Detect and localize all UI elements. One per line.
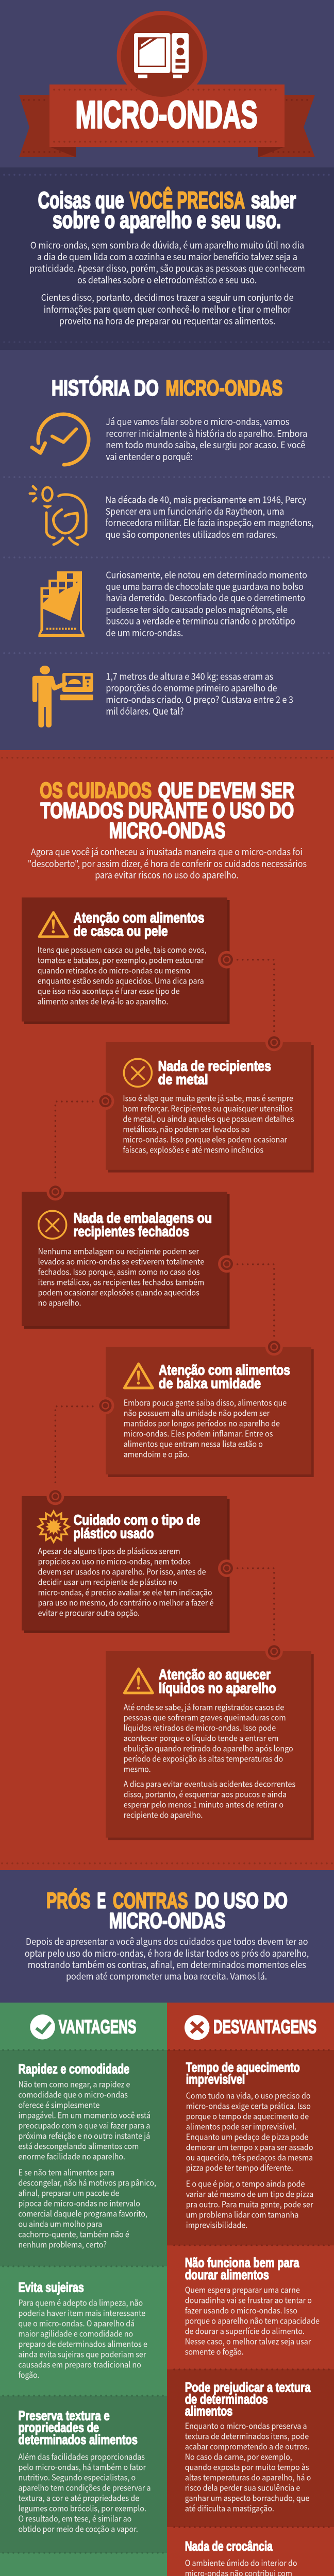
item: rapidez e comodidade: oferece é simplesmente: [19, 2098, 100, 2110]
text block: intro paragraphs: praticidade. Apesar disso, porém, são poucas as pessoas que conhecem: [29, 261, 305, 275]
card text: [123, 1092, 294, 1156]
card text: itens metálicos, os recipientes fechados também: [38, 1275, 204, 1287]
card heading: [158, 1058, 271, 1087]
heading: coisas que você precisa saber: Coisas que: [38, 187, 124, 213]
text: history intro: vai entender o porquê:: [106, 450, 193, 463]
card text: [124, 1396, 287, 1460]
item: não funciona bem para dourar: porque o aparelho não tem capacidade: [185, 2314, 320, 2326]
card: tipo de plástico: [22, 1496, 230, 1633]
card heading: de metal: [158, 1071, 208, 1087]
heading: coisas que você precisa saber: VOCÊ PRECISA: [129, 187, 245, 213]
item: tempo de aquecimento: imprevisível: [186, 2072, 245, 2087]
item: preserva textura: obtido por meio de cocção a vapor.: [19, 2522, 138, 2534]
item: nada de crocância: Nada de crocância: [185, 2538, 273, 2554]
item: evita sujeiras: causadas em preparo tradicional no: [19, 2358, 141, 2370]
item: rapidez e comodidade: comodidade que o micro-ondas: [19, 2088, 128, 2100]
item: tempo de aquecimento: porque o tempo de aquecimento de: [186, 2109, 309, 2122]
item: rapidez e comodidade: comercial daquele programa favorito,: [19, 2207, 147, 2219]
item: evita sujeiras: maior agilidade e comodidade no: [19, 2327, 133, 2339]
vantagens header: [30, 2014, 136, 2039]
item: tempo de aquecimento: ou aquecido, três pedaços da mesma: [186, 2150, 313, 2163]
item: pode prejudicar a textura: No caso da carne, por exemplo,: [185, 2450, 292, 2462]
card: aquecer líquidos: [106, 1651, 314, 1840]
badge: outer circle: [116, 11, 207, 101]
card text: Apesar de alguns tipos de plásticos serem: [38, 1545, 180, 1557]
heading: história: HISTÓRIA DO: [52, 375, 159, 400]
card text: quando retirados do micro-ondas ou mesmo: [38, 963, 190, 976]
card text: não possuem alta umidade não podem ser: [124, 1406, 270, 1419]
icon: person with lightbulb idea: [30, 486, 86, 545]
text: dimensions: mil dólares. Que tal?: [106, 704, 184, 718]
text: chocolate: buscou a verdade e terminou criando o protótipo: [106, 614, 295, 628]
icon: chocolate bar: [38, 571, 85, 637]
item: tempo de aquecimento: pizza pode ter tempo diferente.: [186, 2161, 293, 2173]
ribbon banner: [19, 84, 315, 157]
item: não funciona bem para dourar: Nesse caso, o melhor talvez seja usar: [185, 2334, 311, 2347]
item: tempo de aquecimento: E o que é pior, o tempo ainda pode: [186, 2177, 305, 2189]
text: chocolate: pudesse ter sido causado pelos magnétons, ele: [106, 603, 288, 616]
item: tempo de aquecimento: variar até mesmo de um tipo de pizza: [186, 2187, 313, 2199]
card text: pessoas que sofreram graves queimaduras com: [124, 1710, 286, 1723]
card text: metálicos, não podem ser levados ao: [123, 1123, 249, 1135]
item: nada de crocância: [185, 2538, 315, 2576]
heading: prós e contras: PRÓS: [46, 1888, 91, 1913]
item: não funciona bem para dourar: Quem espera preparar uma carne: [185, 2283, 300, 2295]
text: prós e contras intro: [25, 1935, 309, 1983]
item: tempo de aquecimento: alimentos pode ser imprevisível.: [186, 2120, 296, 2132]
card text: micro-ondas. Eles podem inflamar. Entre os: [124, 1427, 273, 1439]
item: pode prejudicar a textura: de determinados: [185, 2392, 268, 2407]
heading: prós e contras: MICRO-ONDAS: [109, 1908, 225, 1933]
text: history intro: Já que vamos falar sobre o micro-ondas, vamos: [106, 415, 289, 428]
item: não funciona bem para dourar: [185, 2255, 320, 2357]
item: preserva textura: textura, a cor e até propriedades de: [19, 2491, 139, 2503]
icon: x in circle: [124, 1059, 152, 1087]
item: pode prejudicar a textura: ganhar um aspecto borrachudo, que: [185, 2491, 310, 2503]
item: preserva textura: Preserva textura e: [19, 2408, 110, 2423]
card heading: [74, 1512, 200, 1541]
item: rapidez e comodidade: enorme facilidade no aparelho.: [19, 2149, 125, 2162]
item: pode prejudicar a textura: quando exposta por muito tempo às: [185, 2460, 309, 2472]
heading: os cuidados: OS CUIDADOS: [40, 778, 152, 803]
icon: warning triangle: [39, 912, 68, 937]
item: rapidez e comodidade: nenhum problema, certo?: [19, 2238, 107, 2250]
dotted connectors between cards: [55, 960, 274, 1640]
card text: tomates e batatas, por exemplo, podem estourar: [38, 953, 204, 965]
item: tempo de aquecimento: micro-ondas exige certa prática. Isso: [186, 2099, 311, 2111]
text: percy spencer: fornecedora militar. Ele fazia inspeção em magnétons,: [106, 516, 314, 529]
text: dimensions: [106, 669, 293, 718]
card text: que isso não aconteça é furar esse tipo de: [38, 984, 180, 996]
item: preserva textura: determinados alimentos: [19, 2432, 138, 2447]
card text: micro-ondas. Isso porque eles podem ocasionar: [123, 1133, 288, 1145]
item: tempo de aquecimento: demorar um tempo x para ser assado: [186, 2140, 313, 2153]
text: history intro: recorrer inicialmente à história do aparelho. Embora: [106, 427, 307, 440]
panel: introduction: [0, 167, 334, 350]
item: preserva textura: nutritivo. Segundo especialistas, o: [19, 2470, 136, 2483]
heading: prós e contras: [46, 1888, 288, 1933]
text: chocolate: [106, 568, 307, 639]
heading: os cuidados: [40, 778, 294, 843]
heading: prós e contras: CONTRAS: [113, 1888, 188, 1913]
card heading: Atenção ao aquecer: [159, 1666, 271, 1682]
card text: levados ao micro-ondas se estiverem totalmente: [38, 1255, 204, 1267]
item: não funciona bem para dourar: dourar alimentos: [185, 2267, 269, 2282]
card heading: de baixa umidade: [159, 1375, 261, 1391]
text: prós e contras intro: podem até comprometer uma boa receita. Vamos lá.: [66, 1970, 267, 1983]
panel: história do micro-ondas: [0, 350, 334, 750]
item: rapidez e comodidade: preocupado com o que vai fazer para a: [19, 2119, 150, 2131]
text: chocolate: de um micro-ondas.: [106, 626, 183, 639]
text: dimensions: micro-ondas criado. O preço? Custava entre 2 e 3: [106, 692, 293, 706]
icon: warning triangle: [124, 1669, 153, 1693]
card text: Embora pouca gente saiba disso, alimentos que: [124, 1396, 287, 1409]
heading: história: [52, 375, 282, 400]
item: tempo de aquecimento: Enquanto um pedaço de pizza pode: [186, 2130, 309, 2142]
item: rapidez e comodidade: [19, 2061, 156, 2250]
icon: starburst: [38, 1511, 69, 1542]
text: dimensions: proporções do enorme primeiro aparelho de: [106, 681, 277, 694]
card text: enquanto estão sendo aquecidos. Uma dica para: [38, 974, 204, 986]
text: chocolate: Curiosamente, ele notou em determinado momento: [106, 568, 307, 581]
text: history intro: nem todo mundo saiba, ele surgiu por acaso. E você: [106, 438, 305, 451]
card heading: Nada de embalagens ou: [74, 1210, 212, 1226]
card text: alimento antes de levá-lo ao aparelho.: [38, 994, 168, 1007]
card: embalagens fechadas: [22, 1192, 230, 1329]
heading: história: MICRO-ONDAS: [166, 376, 282, 400]
card text: mantidos por longos períodos no aparelho de: [124, 1417, 280, 1429]
card text: líquidos retirados de micro-ondas. Isso pode: [124, 1721, 276, 1733]
card text: ebulição quando retirado do aparelho após longo: [124, 1741, 293, 1754]
card heading: Atenção com alimentos: [159, 1362, 290, 1378]
item: nada de crocância: O ambiente úmido do interior do: [185, 2556, 297, 2568]
item: rapidez e comodidade: afinal, preparar um pacote de: [19, 2186, 120, 2198]
text: cuidados intro: Agora que você já conheceu a inusitada maneira que o micro-ondas foi: [31, 845, 303, 858]
card text: [38, 1244, 204, 1308]
card text: esperar pelo menos 1 minuto antes de retirar o: [124, 1798, 283, 1810]
item: pode prejudicar a textura: [185, 2380, 311, 2514]
card heading: [74, 1210, 212, 1239]
card text: Nenhuma embalagem ou recipiente podem ser: [38, 1244, 199, 1257]
card text: Até onde se sabe, já foram registrados casos de: [124, 1700, 284, 1713]
item: rapidez e comodidade: ou ainda um molho para: [19, 2217, 102, 2229]
item: pode prejudicar a textura: alimentos: [185, 2403, 232, 2419]
card text: decidir usar um recipiente de plástico no: [38, 1575, 177, 1588]
text block: intro paragraphs: [29, 238, 305, 327]
card text: Isso é algo que muita gente já sabe, mas é sempre: [123, 1092, 293, 1104]
item: evita sujeiras: Para quem é adepto da limpeza, não: [19, 2296, 143, 2308]
text: history intro: [106, 415, 307, 463]
card text: amendoim e o pão.: [124, 1448, 189, 1460]
item: preserva textura: O resultado, em tese, é similar ao: [19, 2512, 131, 2524]
card heading: líquidos no aparelho: [159, 1680, 276, 1696]
heading: os cuidados: MICRO-ONDAS: [109, 819, 225, 843]
card text: mesmo.: [124, 1762, 151, 1774]
vantagens header: VANTAGENS: [59, 2016, 136, 2038]
item: evita sujeiras: ainda evita sujeiras que poderiam ser: [19, 2347, 146, 2360]
item: não funciona bem para dourar: Não funciona bem para: [185, 2255, 299, 2270]
card text: propícios ao uso no micro-ondas, nem todos: [38, 1555, 191, 1567]
icon: x in circle: [39, 1211, 66, 1239]
text: chocolate: havia derretido. Desconfiado de que o derretimento: [106, 591, 305, 604]
item: não funciona bem para dourar: somente o fogão.: [185, 2345, 244, 2357]
item: não funciona bem para dourar: douradinha vai se frustrar ao tentar o: [185, 2293, 312, 2306]
card text: evitar e procurar outra opção.: [38, 1606, 140, 1619]
text: prós e contras intro: mostrando também os contras, afinal, em determinados momentos eles: [28, 1958, 306, 1971]
card heading: Atenção com alimentos: [74, 910, 205, 926]
card heading: plástico usado: [74, 1525, 154, 1541]
item: pode prejudicar a textura: acabar comprometendo a de outros.: [185, 2439, 309, 2452]
panel: desvantagens column: [167, 2003, 334, 2576]
heading: prós e contras: DO USO DO: [195, 1888, 288, 1913]
text: prós e contras intro: optar pelo uso do micro-ondas, é hora de listar todos os prós do aparelho,: [25, 1946, 309, 1960]
item: preserva textura: [19, 2408, 151, 2534]
panel: header: [0, 0, 334, 167]
text: percy spencer: que são componentes utilizados em radares.: [106, 528, 277, 541]
badge: inner circle: [121, 15, 203, 97]
item: rapidez e comodidade: descongelar, não há motivos pra pânico,: [19, 2176, 156, 2188]
text: dimensions: 1,7 metros de altura e 340 kg: essas eram as: [106, 669, 273, 683]
item: rapidez e comodidade: próxima refeição e no outro instante já: [19, 2129, 150, 2141]
item: pode prejudicar a textura: textura de determinados itens, pode: [185, 2429, 309, 2442]
text block: intro paragraphs: O micro-ondas, sem sombra de dúvida, é um aparelho muito útil no dia: [30, 238, 304, 251]
card text: micro-ondas, é preciso avaliar se ele tem indicação: [38, 1586, 212, 1598]
panel: cuidados: [0, 750, 334, 1870]
item: evita sujeiras: que o micro-ondas. O aparelho dá: [19, 2316, 135, 2329]
card: recipientes de metal: [106, 1042, 314, 1173]
card: baixa umidade: [106, 1347, 314, 1477]
text: cuidados intro: para evitar riscos no uso do aparelho.: [95, 868, 239, 882]
item: tempo de aquecimento: imprevisibilidade.: [186, 2218, 247, 2230]
item: pode prejudicar a textura: altas temperaturas do aparelho, há o: [185, 2470, 311, 2483]
heading: coisas que você precisa saber: saber: [251, 187, 296, 213]
item: preserva textura: propriedades de: [19, 2420, 99, 2435]
item: rapidez e comodidade: Não tem como negar, a rapidez e: [19, 2077, 130, 2090]
card text: A dica para evitar eventuais acidentes decorrentes: [124, 1777, 295, 1789]
card text: de metal, ou ainda aqueles que possuem detalhes: [123, 1112, 294, 1125]
panel: vantagens column: [0, 2003, 167, 2576]
item: rapidez e comodidade: está descongelando alimentos com: [19, 2139, 139, 2151]
text: percy spencer: Na década de 40, mais precisamente em 1946, Percy: [106, 493, 307, 506]
text: cuidados intro: "descoberto", por assim dizer, é hora de conferir os cuidados necessários: [28, 857, 307, 870]
item: não funciona bem para dourar: de dourar a superfície do alimento.: [185, 2324, 305, 2336]
desvantagens header: [185, 2015, 316, 2040]
item: evita sujeiras: Evita sujeiras: [19, 2279, 84, 2295]
card heading: Cuidado com o tipo de: [74, 1512, 200, 1528]
card heading: de casca ou pele: [74, 923, 168, 939]
item: evita sujeiras: preparo de determinados alimentos e: [19, 2337, 147, 2349]
item: pode prejudicar a textura: até dificulta a mastigação.: [185, 2501, 274, 2514]
item: evita sujeiras: [19, 2279, 147, 2380]
item: tempo de aquecimento: um problema lidar com tamanha: [186, 2208, 298, 2220]
item: pode prejudicar a textura: Enquanto o micro-ondas preserva a: [185, 2419, 307, 2431]
text: chocolate: que uma barra de chocolate que guardava no bolso: [106, 580, 304, 593]
text: prós e contras intro: Depois de apresentar a você alguns dos cuidados que todos devem ter ao: [26, 1935, 308, 1948]
card text: período de exposição às altas temperaturas do: [124, 1752, 283, 1764]
card text: alimentos que entram nessa lista estão o: [124, 1437, 263, 1450]
item: rapidez e comodidade: E se não tem alimentos para: [19, 2165, 114, 2178]
card text: disso, portanto, é esquentar aos poucos e ainda: [124, 1787, 287, 1800]
text block: intro paragraphs: a dia de quem lida com a cozinha e seu maior benefício talvez seja a: [37, 250, 297, 263]
item: preserva textura: pelo micro-ondas, há também o fator: [19, 2460, 146, 2472]
item: tempo de aquecimento: [186, 2059, 313, 2230]
card text: no aparelho.: [38, 1296, 81, 1308]
card heading: recipientes fechados: [74, 1223, 189, 1239]
card heading: [159, 1362, 290, 1391]
card text: para uso no mesmo, do contrário o melhor a fazer é: [38, 1596, 214, 1608]
card text: [38, 943, 207, 1007]
icon: clock with arrow: [32, 414, 89, 465]
heading: coisas que você precisa saber: [38, 187, 296, 233]
card text: [38, 1545, 214, 1619]
card heading: [159, 1666, 276, 1696]
card heading: Nada de recipientes: [158, 1058, 271, 1074]
item: preserva textura: Além das facilidades proporcionadas: [19, 2450, 145, 2462]
item: tempo de aquecimento: Como tudo na vida, o uso preciso do: [186, 2089, 310, 2101]
item: pode prejudicar a textura: risco dela perder sua suculência e: [185, 2481, 300, 2493]
card text: recipiente do aparelho.: [124, 1808, 203, 1820]
icon: person at microwave: [32, 666, 93, 727]
heading: prós e contras: E: [97, 1888, 106, 1913]
card text: faíscas, explosões e até mesmo incêncios: [123, 1143, 263, 1156]
item: tempo de aquecimento: pra outro. Para muita gente, pode ser: [186, 2197, 313, 2210]
card text: podem ocasionar explosões quando aquecidos: [38, 1285, 199, 1298]
text block: intro paragraphs: os detalhes sobre o eletrodoméstico e seu uso.: [77, 273, 257, 286]
icon: warning triangle: [124, 1364, 153, 1388]
card text: devem ser usados no aparelho. Por isso, antes de: [38, 1565, 206, 1578]
item: rapidez e comodidade: impagável. Em um momento você está: [19, 2108, 151, 2121]
card text: [124, 1700, 295, 1820]
icon: microwave: [134, 33, 189, 78]
card: alimentos de casca: [22, 897, 230, 1024]
text block: intro paragraphs: proveito na hora de preparar ou requentar os alimentos.: [59, 314, 275, 327]
connector nodes: [46, 951, 283, 1660]
card text: bom reforçar. Recipientes ou quaisquer utensílios: [123, 1102, 293, 1114]
text: cuidados intro: [28, 845, 307, 882]
item: evita sujeiras: fogão.: [19, 2368, 39, 2380]
card text: Itens que possuem casca ou pele, tais como ovos,: [38, 943, 207, 955]
text block: intro paragraphs: informações para quem quer conhecê-lo melhor e tirar o melhor: [44, 302, 291, 316]
card heading: [74, 910, 205, 939]
item: rapidez e comodidade: pipoca de micro-ondas no intervalo: [19, 2196, 140, 2209]
panel: prós e contras intro: [0, 1870, 334, 2003]
item: preserva textura: legumes como brócolis, por exemplo.: [19, 2501, 146, 2514]
card text: acontecer porque o líquido tende a entrar em: [124, 1731, 278, 1743]
item: tempo de aquecimento: Tempo de aquecimento: [186, 2059, 300, 2075]
card text: fechados. Isso porque, assim como no caso dos: [38, 1265, 200, 1277]
item: rapidez e comodidade: cachorro-quente, também não é: [19, 2227, 129, 2240]
text block: intro paragraphs: Cientes disso, portanto, decidimos trazer a seguir um conjunto de: [41, 291, 294, 304]
item: rapidez e comodidade: Rapidez e comodidade: [19, 2061, 129, 2076]
text: percy spencer: Spencer era um funcionário da Raytheon, uma: [106, 504, 284, 518]
text: percy spencer: [106, 493, 314, 541]
item: evita sujeiras: poderia haver item mais interessante: [19, 2306, 145, 2318]
item: não funciona bem para dourar: fazer usando o micro-ondas. Isso: [185, 2303, 297, 2316]
item: preserva textura: aparelho tem condições de preservar a: [19, 2481, 151, 2493]
